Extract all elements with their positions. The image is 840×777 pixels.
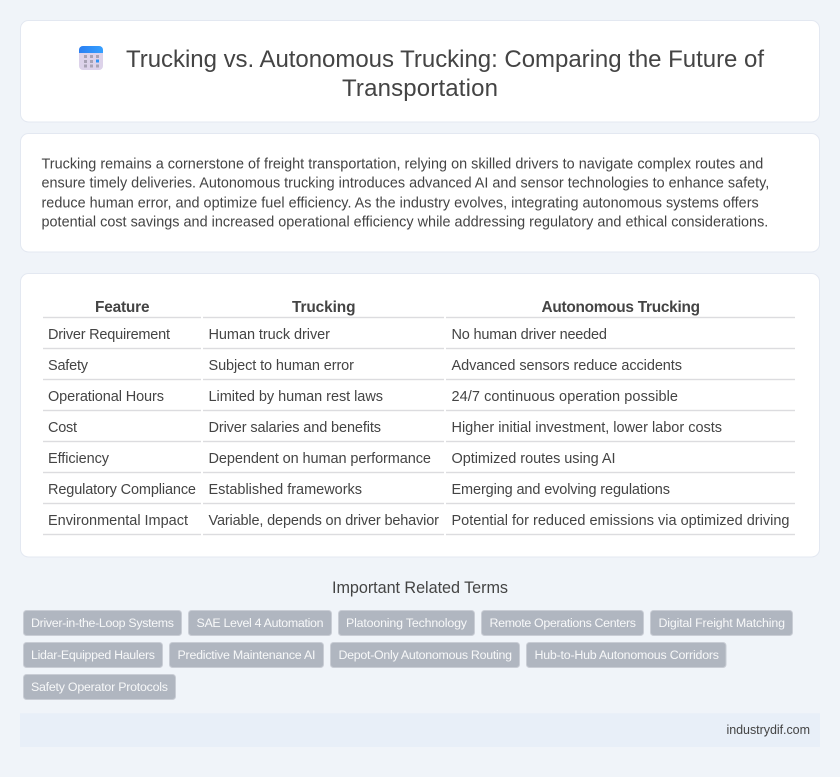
tag: Driver-in-the-Loop Systems [31, 616, 174, 630]
heading: important related terms: Important Related Terms [332, 579, 508, 597]
table row: regulatory compliance: Regulatory Compliance [48, 482, 196, 498]
table row: environmental impact: Potential for reduced emissions via optimized driving [452, 513, 790, 529]
tag [650, 610, 792, 636]
title: Transportation [342, 75, 498, 102]
tag [338, 610, 474, 636]
table row: efficiency [48, 451, 616, 467]
table row: environmental impact [48, 513, 790, 529]
text block: introduction paragraph: reduce human error, and optimize fuel efficiency. As the industry evolves, integrating autonomous systems offers [42, 195, 759, 211]
table header row: Autonomous Trucking [542, 299, 700, 316]
table row: safety [48, 358, 682, 374]
text block: introduction paragraph: ensure timely deliveries. Autonomous trucking introduces advanced AI and sensor technologies to enhance safety, [42, 176, 769, 192]
table row: cost [48, 420, 722, 436]
tag: Predictive Maintenance AI [178, 648, 316, 662]
table row: regulatory compliance: Emerging and evolving regulations [452, 482, 670, 498]
tag list [24, 610, 792, 700]
title: Trucking vs. Autonomous Trucking: Comparing the Future of [126, 46, 764, 73]
table row: environmental impact: Environmental Impact [48, 513, 188, 529]
footer text: industrydif.com [726, 723, 810, 737]
text block: introduction paragraph [42, 156, 769, 230]
table row: operational hours: Operational Hours [48, 389, 164, 405]
table row: cost: Higher initial investment, lower labor costs [452, 420, 722, 436]
table row: efficiency: Optimized routes using AI [452, 451, 616, 467]
table header row: Trucking [292, 299, 356, 316]
table header row: Feature [95, 299, 150, 316]
tag: SAE Level 4 Automation [196, 616, 324, 630]
text block: introduction paragraph: Trucking remains a cornerstone of freight transportation, relying on skilled drivers to navigate complex routes and [42, 156, 763, 172]
table row: efficiency: Efficiency [48, 451, 110, 467]
table row: regulatory compliance: Established frameworks [208, 482, 362, 498]
table row: safety: Subject to human error [208, 358, 354, 374]
icon: calendar [79, 46, 103, 70]
table row: driver requirement: Human truck driver [208, 327, 330, 343]
tag: Safety Operator Protocols [31, 680, 168, 694]
tag [24, 674, 176, 700]
tag: Depot-Only Autonomous Routing [338, 648, 512, 662]
panel: comparison table [20, 274, 820, 557]
table row: cost: Driver salaries and benefits [208, 420, 381, 436]
tag: Digital Freight Matching [658, 616, 785, 630]
tag [330, 642, 520, 668]
table row: efficiency: Dependent on human performance [208, 451, 431, 467]
table row: operational hours: 24/7 continuous operation possible [452, 389, 678, 405]
tag: Hub-to-Hub Autonomous Corridors [534, 648, 719, 662]
tag [482, 610, 644, 636]
table row: cost: Cost [48, 420, 77, 436]
footer bar [20, 713, 820, 747]
tag [526, 642, 726, 668]
tag [24, 610, 182, 636]
table row: driver requirement: No human driver needed [452, 327, 607, 343]
tag [170, 642, 324, 668]
tag [188, 610, 332, 636]
panel: introduction [20, 134, 820, 252]
table row: driver requirement: Driver Requirement [48, 327, 170, 343]
table row: safety: Safety [48, 358, 89, 374]
tag [24, 642, 162, 668]
table row: safety: Advanced sensors reduce accidents [452, 358, 682, 374]
panel: title card [20, 20, 820, 122]
table row: environmental impact: Variable, depends on driver behavior [208, 513, 439, 529]
text block: introduction paragraph: potential cost savings and increased operational efficiency while addressing regulatory and ethical considerations. [42, 214, 768, 230]
tag: Lidar-Equipped Haulers [31, 648, 155, 662]
tag: Remote Operations Centers [490, 616, 636, 630]
table row: regulatory compliance [48, 482, 670, 498]
table row: operational hours: Limited by human rest laws [208, 389, 383, 405]
table row: operational hours [48, 389, 678, 405]
table header row [95, 299, 700, 316]
tag: Platooning Technology [346, 616, 468, 630]
title [126, 46, 764, 102]
table row: driver requirement [48, 327, 607, 343]
